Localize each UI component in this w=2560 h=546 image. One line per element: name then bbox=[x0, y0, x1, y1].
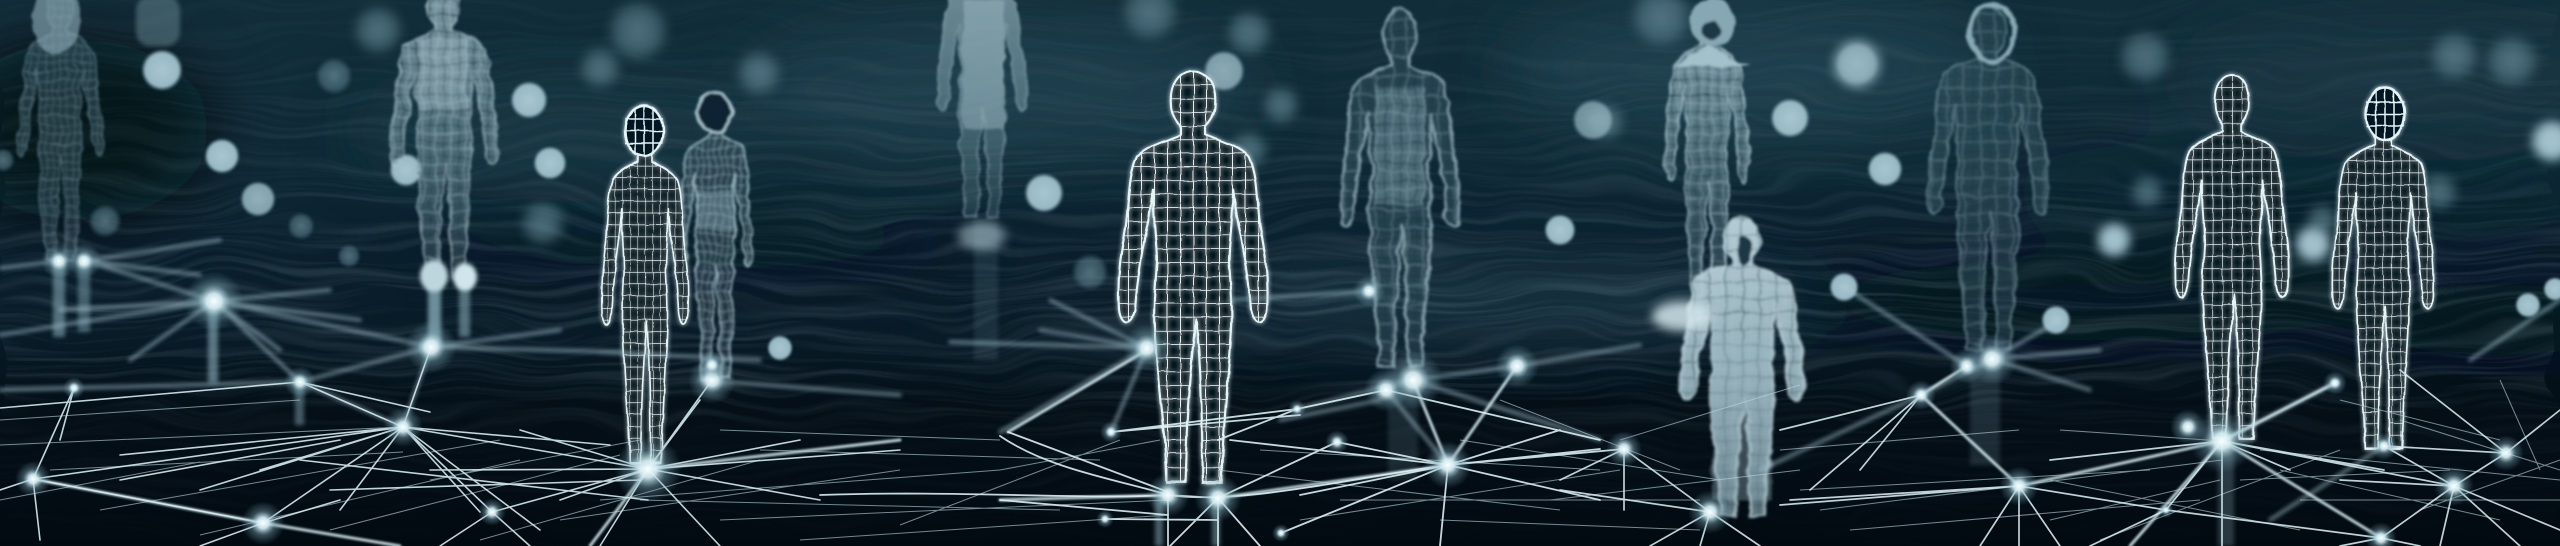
network: sharp links left bbox=[0, 347, 900, 546]
background streak texture bbox=[0, 78, 2560, 436]
figure: ghost with checked torso bbox=[390, 0, 498, 279]
figure: wireframe woman bbox=[602, 106, 688, 463]
network: bright thick rays bbox=[33, 350, 2381, 546]
network nodes bbox=[15, 243, 2524, 546]
bokeh lights bbox=[0, 0, 2560, 361]
figure feet glow bbox=[420, 260, 477, 292]
figure: wireframe person far right bbox=[2332, 88, 2434, 448]
figure: main wireframe man bbox=[1118, 71, 1268, 482]
network: mesh of fine lines bbox=[0, 380, 2560, 540]
figure glow: shoulder blob bbox=[1652, 301, 1712, 331]
figure: ghost man bbox=[1341, 10, 1459, 367]
figure: ghost top centre bbox=[937, 0, 1027, 216]
figure foot glow: top centre bbox=[958, 222, 1006, 250]
network: sharp links centre bbox=[820, 390, 1624, 546]
network: sharp links right bbox=[1560, 370, 2560, 546]
figure: bright foreground ghost bbox=[1681, 218, 1803, 516]
figure: wireframe man right bbox=[2175, 75, 2289, 439]
figure: ghost top left edge bbox=[136, 0, 180, 46]
floor reflections bbox=[53, 220, 2234, 546]
figure: ghost companion bbox=[678, 90, 752, 379]
background haze bbox=[0, 0, 2560, 355]
network: soft blurred links bbox=[0, 240, 2560, 520]
figure: dark ghost bbox=[1928, 4, 2048, 349]
figure: ghost light torso bbox=[1665, 0, 1750, 298]
figure: ghost far left bbox=[18, 0, 102, 261]
